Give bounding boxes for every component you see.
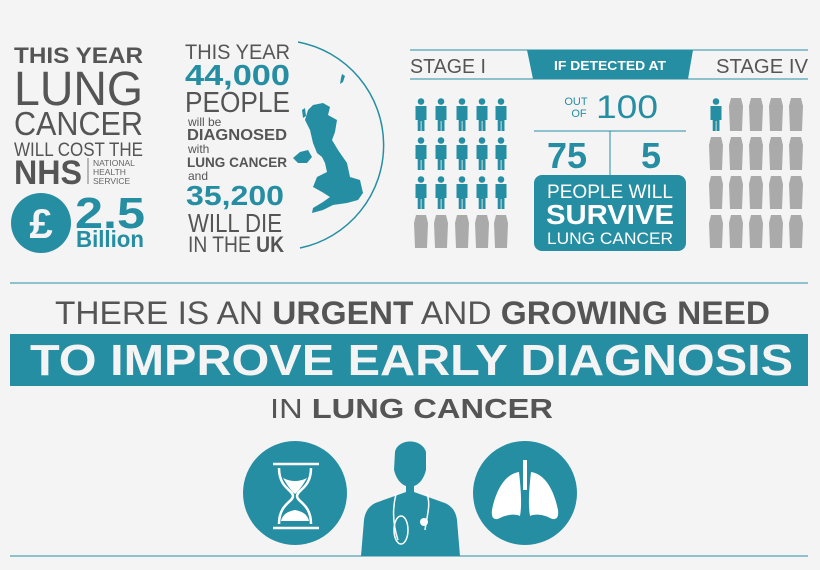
- callout: people will survive: LUNG CANCER: [547, 229, 673, 248]
- panel: UK diagnoses: [185, 41, 384, 257]
- icon: doctor: [361, 442, 460, 556]
- panel: UK diagnoses: LUNG CANCER: [187, 154, 287, 170]
- chart: stage I figures: [414, 98, 508, 248]
- text: LUNG: LUNG: [14, 63, 143, 116]
- text: 2.5: 2.5: [75, 189, 145, 238]
- text: stage I: STAGE I: [410, 56, 486, 78]
- banner: if detected at: IF DETECTED AT: [554, 58, 666, 73]
- text: THIS YEAR: THIS YEAR: [14, 43, 143, 68]
- icon: pound coin: [11, 193, 71, 253]
- text: out of 100: 100: [596, 89, 658, 125]
- text: out of 100: [564, 89, 658, 125]
- panel: UK diagnoses: PEOPLE: [185, 87, 290, 119]
- callout: people will survive: PEOPLE WILL: [547, 182, 673, 203]
- panel: survival by stage: [410, 50, 809, 251]
- text: WILL COST THE: WILL COST THE: [14, 140, 143, 161]
- text: in lung cancer: IN LUNG CANCER: [270, 393, 553, 424]
- panel: UK diagnoses: WILL DIE: [188, 208, 282, 238]
- text: national health service: HEALTH: [93, 167, 126, 177]
- panel: UK diagnoses: DIAGNOSED: [187, 127, 287, 144]
- text: stage IV: STAGE IV: [716, 56, 809, 78]
- panel: NHS cost: [11, 43, 145, 253]
- panel: UK diagnoses: IN THE UK: [188, 232, 284, 257]
- text: CANCER: CANCER: [14, 105, 143, 142]
- callout: people will survive: [534, 175, 686, 251]
- text: 75: 75: [547, 135, 587, 176]
- text: NHS: NHS: [14, 154, 82, 192]
- panel: UK diagnoses: will be: [187, 115, 222, 129]
- text: Billion: Billion: [76, 226, 144, 252]
- text: national health service: NATIONAL: [93, 158, 135, 168]
- text: 35,200 will die in the UK: 35,200: [186, 180, 284, 211]
- arc: [298, 42, 384, 248]
- callout: people will survive: SURVIVE: [546, 199, 674, 230]
- banner: if detected at: [527, 50, 693, 79]
- icon: hourglass: [243, 441, 347, 545]
- text: 5: 5: [641, 135, 661, 176]
- text: out of 100: OUT: [564, 96, 588, 108]
- icon: pound coin: £: [29, 200, 53, 247]
- text: this year 44,000 people: THIS YEAR: [185, 41, 290, 64]
- icon: lungs: [473, 441, 577, 545]
- heading: urgent need: THERE IS AN URGENT AND GROWING NEED: [55, 295, 770, 331]
- banner: improve early diagnosis: TO IMPROVE EARLY DIAGNOSIS: [30, 336, 793, 385]
- panel: UK diagnoses: and: [188, 169, 208, 183]
- icon: UK map: [293, 74, 363, 213]
- chart: stage IV figures: [709, 98, 803, 248]
- panel: UK diagnoses: with: [187, 142, 209, 156]
- text: out of 100: OF: [571, 108, 587, 120]
- panel: UK diagnoses: 44,000: [185, 60, 290, 92]
- text: national health service: SERVICE: [93, 176, 130, 186]
